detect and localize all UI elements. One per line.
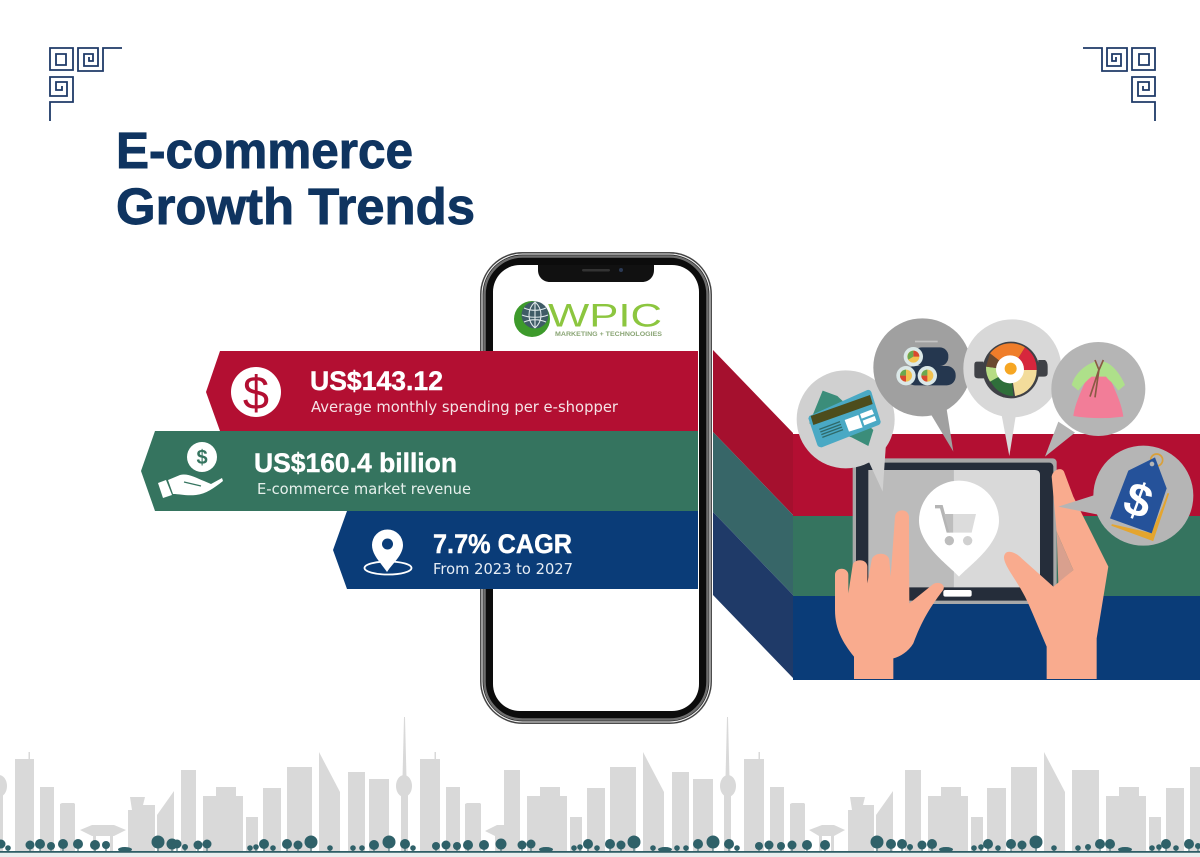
speech bubble: price tag <box>1058 446 1193 546</box>
phone screen <box>493 265 699 711</box>
speech bubble: price tag: $ <box>1117 471 1159 529</box>
icon: map pin <box>364 530 412 574</box>
title: E-commerce <box>116 122 413 179</box>
icon: dollar coin <box>231 366 281 419</box>
speech bubble: hanbok <box>1045 342 1145 457</box>
WPIC logo: WPIC <box>548 298 662 334</box>
ribbon: market revenue: E-commerce market revenue <box>257 480 471 498</box>
ribbon: CAGR: From 2023 to 2027 <box>433 560 573 578</box>
title <box>116 122 475 235</box>
gates <box>80 825 845 851</box>
icon: hand holding coin <box>158 442 223 498</box>
ground line <box>0 851 1200 853</box>
speaker and camera <box>582 268 623 272</box>
buildings <box>15 752 1200 851</box>
trees <box>0 836 1200 851</box>
title: Growth Trends <box>116 178 475 235</box>
ribbon: CAGR: 7.7% CAGR <box>433 529 572 559</box>
ribbon: monthly spending <box>206 351 698 431</box>
ribbon: CAGR <box>333 511 698 589</box>
WPIC logo <box>514 298 662 338</box>
cars <box>118 847 1132 852</box>
illustration: tablet, hands and speech bubbles <box>797 318 1193 679</box>
colour bands behind tablet <box>793 434 1200 680</box>
ribbon: market revenue: US$160.4 billion <box>254 448 457 478</box>
skyline <box>0 717 1200 857</box>
phone <box>480 252 712 724</box>
speech bubble: credit cards <box>797 370 895 492</box>
ribbon fold: connecting bands <box>713 350 793 678</box>
map pin with cart <box>919 481 999 577</box>
icon: dollar coin: $ <box>243 366 269 419</box>
speech bubble: bibimbap <box>963 319 1061 456</box>
ornament: top right corner meander <box>1083 48 1155 121</box>
broadcast towers <box>0 717 736 851</box>
WPIC logo: MARKETING + TECHNOLOGIES <box>555 332 662 338</box>
ribbon: market revenue <box>141 431 698 511</box>
phone body <box>480 252 712 724</box>
ribbon: monthly spending: US$143.12 <box>310 366 443 396</box>
notch <box>538 265 654 282</box>
ornament: top left corner meander <box>50 48 122 121</box>
icon: hand holding coin: $ <box>196 447 208 469</box>
speech bubble: kimbap <box>873 318 971 452</box>
hand: right <box>1004 469 1108 679</box>
tree stems <box>8 842 1198 851</box>
ribbon: monthly spending: Average monthly spending per e-shopper <box>311 398 619 416</box>
tablet <box>853 458 1057 604</box>
hand: left <box>835 510 944 679</box>
